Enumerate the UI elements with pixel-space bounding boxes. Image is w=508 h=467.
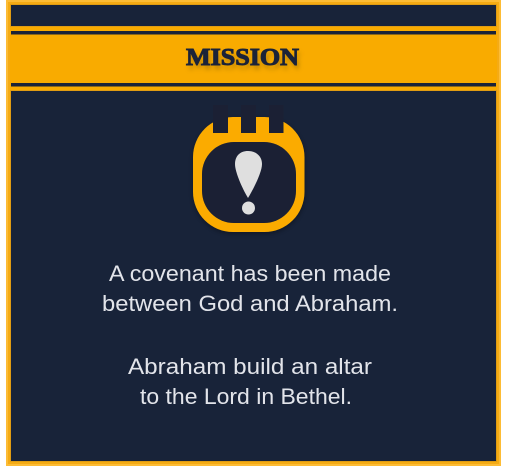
text block: covenant: A covenant has been made [109, 261, 391, 286]
icon: exclamation mark [235, 151, 262, 198]
text block: covenant [102, 261, 398, 316]
title shadow: MISSION [188, 49, 302, 75]
text block: altar: to the Lord in Bethel. [140, 384, 352, 409]
icon: alert calendar [193, 105, 305, 234]
text block: altar [128, 354, 373, 409]
top navy panel [11, 5, 496, 26]
title band [10, 27, 497, 90]
main navy panel [11, 91, 496, 461]
text block: covenant: between God and Abraham. [102, 291, 398, 316]
text block: altar: Abraham build an altar [128, 354, 373, 379]
title: MISSION [186, 45, 300, 71]
